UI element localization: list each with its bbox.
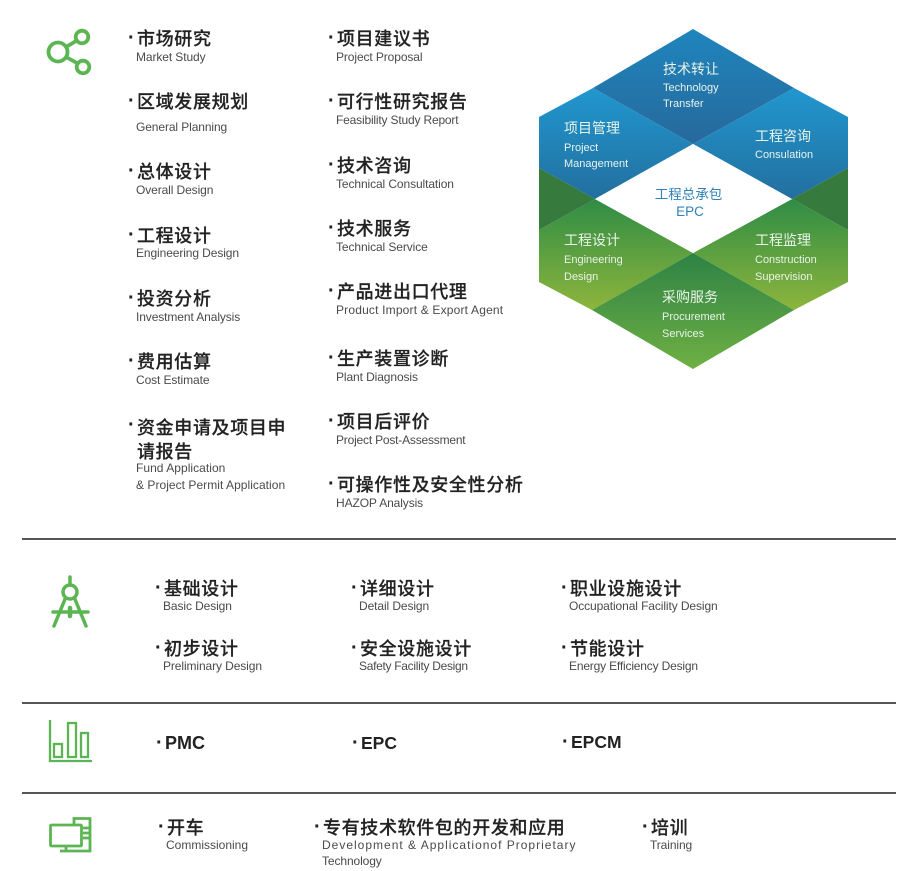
item: safety facility design: Safety Facility Design [359,659,468,673]
item: technical consultation: 技术咨询 [337,152,412,178]
segment: technology transfer [593,29,794,144]
item: basic design: Basic Design [163,599,232,613]
item: hazop analysis: · [328,473,335,495]
item: detail design: Detail Design [359,599,429,613]
item: hazop analysis [328,471,524,510]
item: training: 培训 [651,814,688,840]
item: technical service: Technical Service [336,240,428,254]
item: investment analysis: · [128,287,135,309]
item: plant diagnosis: 生产装置诊断 [337,345,449,371]
segment: engineering design [539,199,693,310]
segment: engineering consultation [693,88,848,199]
item: cost estimate: 费用估算 [137,348,212,374]
item: engineering design: · [128,224,135,246]
item: fund application: 资金申请及项目申 [137,414,286,440]
item: basic design: 基础设计 [164,575,239,601]
item: technical consultation: · [328,154,335,176]
item: detail design: 详细设计 [360,575,435,601]
item: proprietary technology: Technology [322,854,382,868]
item: market study: 市场研究 [137,25,212,51]
item: proprietary technology: Development & Applicationof Proprietary [322,838,576,852]
item: basic design [155,575,239,613]
item: project proposal: · [328,27,335,49]
item: market study: · [128,27,135,49]
segment: engineering design: 工程设计 [564,232,620,248]
item: hazop analysis: HAZOP Analysis [336,496,423,510]
segment: construction supervision [693,199,848,310]
item: proprietary technology [314,814,576,868]
item: training: · [642,816,649,838]
item: PMC: PMC [165,733,205,753]
item: commissioning [158,814,248,852]
item: training [642,814,692,852]
segment: procurement services: Services [662,328,705,340]
item: fund application [128,414,286,492]
segment: engineering consultation: Consulation [755,149,813,161]
segment: engineering consultation: 工程咨询 [755,128,811,144]
item: energy efficiency design: Energy Efficiency Design [569,659,698,673]
item: occupational facility design: Occupational Facility Design [569,599,718,613]
item: technical service [328,215,428,254]
item: project post-assessment: · [328,410,335,432]
item: EPC: · [352,732,359,754]
item: investment analysis: Investment Analysis [136,310,240,324]
item: project proposal: 项目建议书 [337,25,430,51]
hexagon diagram: EPC [539,29,848,369]
item: commissioning: Commissioning [166,838,248,852]
item: product import and export agent: 产品进出口代理 [337,278,468,304]
item: investment analysis: 投资分析 [137,285,212,311]
item: market study: Market Study [136,50,206,64]
item: occupational facility design: 职业设施设计 [570,575,682,601]
item: detail design [351,575,435,613]
item: cost estimate [128,348,212,387]
item: energy efficiency design: 节能设计 [570,635,645,661]
item: preliminary design: Preliminary Design [163,659,262,673]
item: detail design: · [351,577,358,599]
item: general planning: · [128,90,135,112]
item: general planning [128,88,249,134]
segment: procurement services: 采购服务 [662,289,718,305]
item: engineering design: 工程设计 [137,222,212,248]
segment: construction supervision: Construction [755,254,817,266]
item: fund application: & Project Permit Application [136,478,285,492]
segment: technology transfer: Transfer [663,98,704,110]
item: preliminary design: · [155,637,162,659]
item: overall design: Overall Design [136,183,213,197]
item: safety facility design [351,635,472,673]
item: engineering design: Engineering Design [136,246,239,260]
item: safety facility design: 安全设施设计 [360,635,472,661]
item: plant diagnosis: Plant Diagnosis [336,370,418,384]
item: preliminary design: 初步设计 [164,635,239,661]
item: overall design [128,158,213,197]
item: energy efficiency design: · [561,637,568,659]
segment: engineering design: Engineering [564,254,623,266]
item: occupational facility design [561,575,718,613]
item: preliminary design [155,635,262,673]
item: energy efficiency design [561,635,698,673]
item: project post-assessment: Project Post-Assessment [336,433,465,447]
item: commissioning: 开车 [167,814,204,840]
segment: technology transfer: 技术转让 [663,61,719,77]
item: basic design: · [155,577,162,599]
item: project proposal [328,25,430,64]
segment: project management [539,88,693,199]
item: commissioning: · [158,816,165,838]
segment: construction supervision: 工程监理 [755,232,811,248]
item: cost estimate: Cost Estimate [136,373,209,387]
segment: procurement services [592,253,794,369]
item: plant diagnosis [328,345,449,384]
item: feasibility study report: 可行性研究报告 [337,88,468,114]
item: EPCM: · [562,731,569,753]
item: project post-assessment [328,408,466,447]
item: project proposal: Project Proposal [336,50,422,64]
center: EPC: 工程总承包 [655,187,722,202]
segment: technology transfer: Technology [663,82,719,94]
item: investment analysis [128,285,240,324]
segment: construction supervision: Supervision [755,271,812,283]
item: training: Training [650,838,692,852]
item: feasibility study report: Feasibility Study Report [336,113,458,127]
item: product import and export agent: Product Import & Export Agent [336,303,503,317]
segment: engineering design: Design [564,271,598,283]
icon: bar chart [48,720,92,762]
segment: project management: Management [564,158,628,170]
item: EPCM: EPCM [571,732,622,752]
icon: share network [46,28,92,76]
item: cost estimate: · [128,350,135,372]
item: technical consultation [328,152,454,191]
item: technical consultation: Technical Consultation [336,177,454,191]
item: market study [128,25,212,64]
segment: project management: Project [564,142,598,154]
center: EPC [595,144,792,253]
item: general planning: 区域发展规划 [137,88,249,114]
segment: procurement services: Procurement [662,311,725,323]
item: proprietary technology: · [314,816,321,838]
segment: dark green right [792,168,848,230]
item: general planning: General Planning [136,120,227,134]
segment: dark green left [539,168,595,230]
item: fund application: Fund Application [136,461,225,475]
center: EPC: EPC [676,204,704,219]
item: hazop analysis: 可操作性及安全性分析 [337,471,524,497]
item: overall design: 总体设计 [137,158,212,184]
item: EPC: EPC [361,733,397,753]
item: project post-assessment: 项目后评价 [337,408,430,434]
item: fund application: · [128,414,135,436]
item: technical service: · [328,217,335,239]
item: product import and export agent [328,278,503,317]
item: proprietary technology: 专有技术软件包的开发和应用 [323,814,565,840]
item: PMC: · [156,732,163,754]
item: fund application: 请报告 [137,438,193,464]
item: technical service: 技术服务 [337,215,412,241]
item: plant diagnosis: · [328,347,335,369]
item: occupational facility design: · [561,577,568,599]
icon: drafting compass [51,575,90,628]
item: product import and export agent: · [328,280,335,302]
item: safety facility design: · [351,637,358,659]
item: feasibility study report [328,88,468,127]
item: overall design: · [128,160,135,182]
item: engineering design [128,222,239,260]
segment: project management: 项目管理 [564,120,620,136]
icon: desktop computer [49,817,92,852]
item: feasibility study report: · [328,90,335,112]
